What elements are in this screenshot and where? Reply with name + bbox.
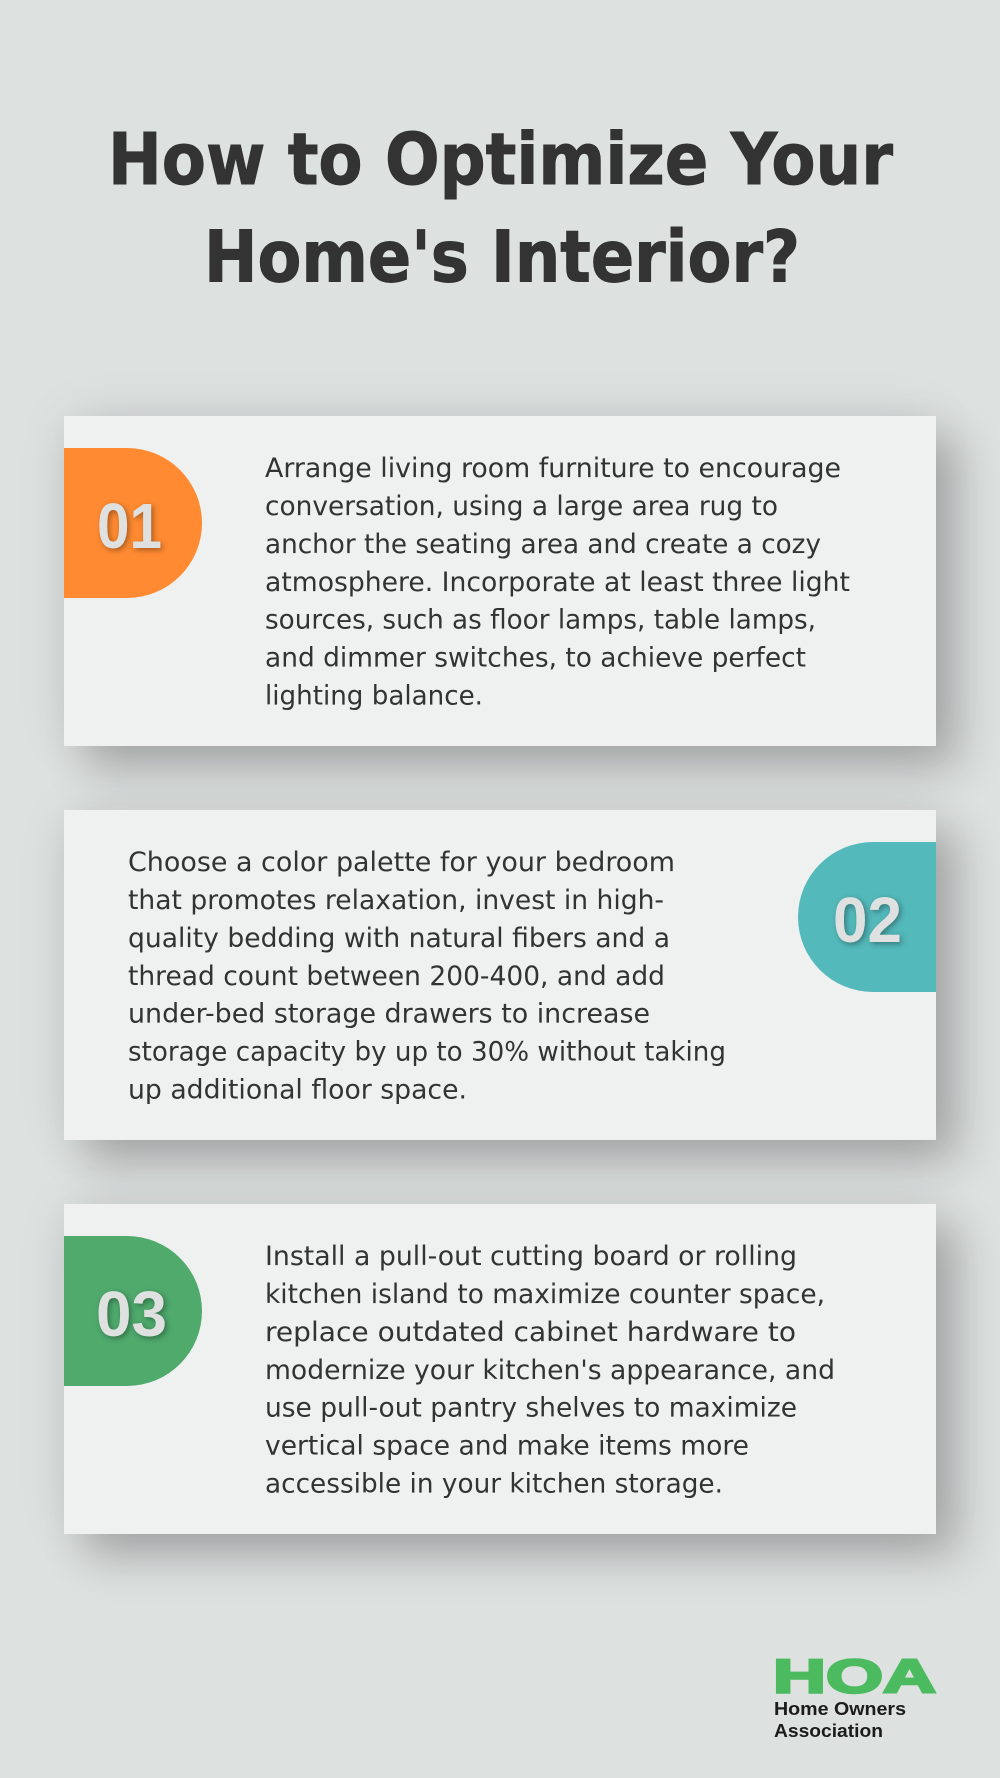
panel: step 02 <box>64 810 936 1140</box>
text block 03: vertical space and make items more <box>265 1430 749 1462</box>
text block 01 <box>265 453 850 711</box>
number badge 02 <box>798 842 936 992</box>
title <box>108 118 894 298</box>
text block 03: kitchen island to maximize counter space, <box>265 1279 825 1310</box>
text block 01: conversation, using a large area rug to <box>265 491 778 522</box>
text block 02: thread count between 200-400, and add <box>128 961 665 992</box>
panel: step 03 <box>64 1204 936 1534</box>
text block 01: sources, such as floor lamps, table lamps, <box>265 605 816 636</box>
number badge 01 <box>64 448 202 598</box>
text block 01: Arrange living room furniture to encourage <box>265 453 841 484</box>
panel: step 01 <box>64 416 936 746</box>
title: How to Optimize Your <box>108 118 893 201</box>
text block 03: Install a pull-out cutting board or rolling <box>265 1241 797 1272</box>
logo: Home Owners Association: Association <box>774 1721 883 1741</box>
text block 01: anchor the seating area and create a cozy <box>265 529 821 560</box>
logo: Home Owners Association: HOA <box>773 1650 936 1702</box>
text block 02: that promotes relaxation, invest in high- <box>128 885 664 916</box>
number badge 03 <box>64 1236 202 1386</box>
logo: Home Owners Association <box>773 1650 937 1741</box>
number badge 01: 01 <box>97 490 162 562</box>
text block 02 <box>128 847 726 1105</box>
text block 03: modernize your kitchen's appearance, and <box>265 1355 835 1386</box>
number badge 03: 03 <box>96 1278 167 1350</box>
title: Home's Interior? <box>204 216 800 298</box>
text block 03: accessible in your kitchen storage. <box>265 1468 723 1499</box>
text block 02: Choose a color palette for your bedroom <box>128 847 675 878</box>
logo: Home Owners Association: Home Owners <box>774 1699 906 1719</box>
text block 02: quality bedding with natural fibers and a <box>128 923 670 954</box>
text block 01: atmosphere. Incorporate at least three light <box>265 567 850 598</box>
text block 02: under-bed storage drawers to increase <box>128 999 650 1030</box>
text block 03: use pull-out pantry shelves to maximize <box>265 1393 797 1424</box>
text block 02: up additional floor space. <box>128 1074 467 1105</box>
number badge 02: 02 <box>833 884 902 956</box>
text block 03 <box>265 1241 835 1499</box>
text block 01: and dimmer switches, to achieve perfect <box>265 642 806 674</box>
text block 01: lighting balance. <box>265 680 483 711</box>
text block 03: replace outdated cabinet hardware to <box>265 1317 796 1348</box>
text block 02: storage capacity by up to 30% without taking <box>128 1036 726 1068</box>
